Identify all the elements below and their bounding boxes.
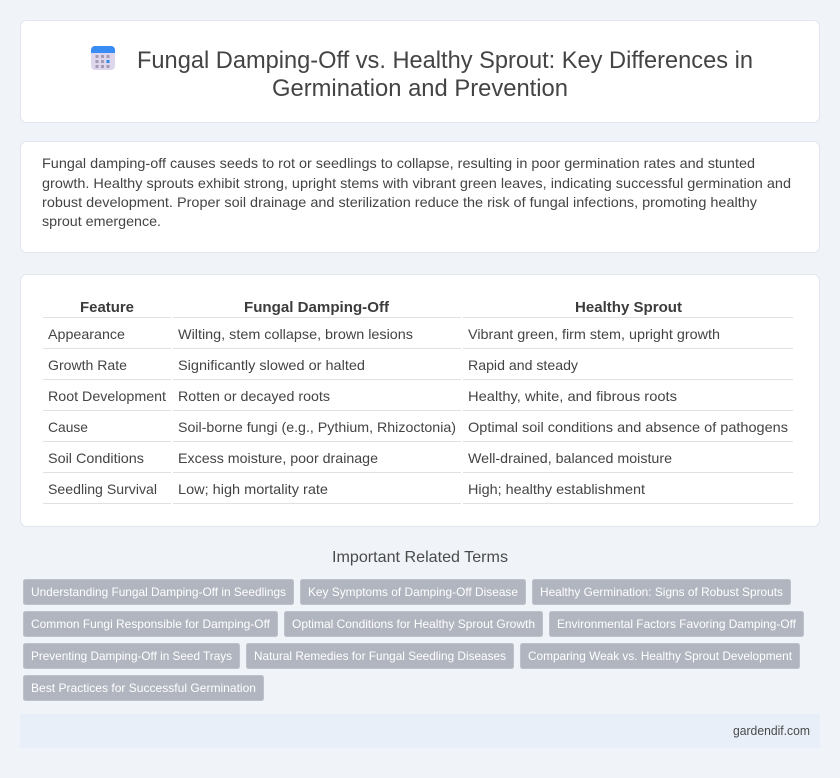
table row: soil conditions: Soil Conditions: [48, 450, 144, 466]
tag: [532, 580, 790, 604]
title: Germination and Prevention: [272, 75, 568, 102]
table row: seedling survival: High; healthy establishment: [468, 481, 645, 497]
tag: Common Fungi Responsible for Damping-Off: [31, 617, 271, 631]
table row: cause: Cause: [48, 419, 88, 435]
tag: Healthy Germination: Signs of Robust Sprouts: [540, 585, 783, 599]
table row: appearance: Appearance: [48, 326, 125, 342]
table row: seedling survival: Seedling Survival: [48, 481, 157, 497]
tag: Natural Remedies for Fungal Seedling Diseases: [254, 649, 506, 663]
related term tags: [24, 580, 804, 700]
table row: growth rate: Growth Rate: [48, 357, 127, 373]
text block: summary: [42, 155, 791, 229]
table header: Feature: [80, 299, 134, 316]
panel: summary paragraph: [20, 142, 820, 252]
tag: [300, 580, 526, 604]
table row: growth rate: Significantly slowed or halted: [178, 357, 365, 373]
tag: [24, 644, 240, 668]
table row: cause: Optimal soil conditions and absence of pathogens: [468, 419, 788, 435]
tag: Preventing Damping-Off in Seed Trays: [31, 649, 232, 663]
table row: root development: Healthy, white, and fibrous roots: [468, 388, 677, 404]
table row: growth rate: Rapid and steady: [468, 357, 578, 373]
tag: Understanding Fungal Damping-Off in Seedlings: [31, 585, 286, 599]
table header: [80, 299, 682, 316]
text block: summary: growth. Healthy sprouts exhibit strong, upright stems with vibrant green leaves, indicating successful germination and: [42, 175, 791, 191]
title: Fungal Damping-Off vs. Healthy Sprout: Key Differences in: [137, 47, 753, 74]
table row: seedling survival: Low; high mortality rate: [178, 481, 328, 497]
text block: summary: robust development. Proper soil drainage and sterilization reduce the risk of fungal infections, promoting healthy: [42, 194, 757, 210]
table row: appearance: Vibrant green, firm stem, upright growth: [468, 326, 720, 342]
footer source: gardendif.com: [733, 723, 810, 738]
panel: comparison table: [20, 274, 820, 526]
table row: cause: [48, 419, 788, 435]
table row: cause: Soil-borne fungi (e.g., Pythium, Rhizoctonia): [178, 419, 456, 435]
tag: [24, 580, 294, 604]
tag: Best Practices for Successful Germination: [31, 681, 256, 695]
footer bar: [20, 714, 820, 748]
table row: appearance: [48, 326, 720, 342]
title: [137, 47, 753, 102]
tag: [24, 676, 264, 700]
table row: root development: Root Development: [48, 388, 166, 404]
tag: [24, 612, 278, 636]
tag: [284, 612, 542, 636]
table header: Healthy Sprout: [575, 299, 682, 316]
table row: root development: Rotten or decayed roots: [178, 388, 330, 404]
text block: summary: sprout emergence.: [42, 213, 161, 229]
tag: Environmental Factors Favoring Damping-Off: [557, 617, 797, 631]
table header: Fungal Damping-Off: [244, 299, 390, 316]
tag: [520, 644, 800, 668]
text block: summary: Fungal damping-off causes seeds to rot or seedlings to collapse, resulting in poor germination rates and stunted: [42, 155, 755, 171]
tag: [246, 644, 514, 668]
table row: appearance: Wilting, stem collapse, brown lesions: [178, 326, 413, 342]
table row: growth rate: [48, 357, 578, 373]
tag: Key Symptoms of Damping-Off Disease: [308, 585, 518, 599]
table row: seedling survival: [48, 481, 645, 497]
table row: soil conditions: [48, 450, 672, 466]
table row: soil conditions: Well-drained, balanced moisture: [468, 450, 672, 466]
table row: root development: [48, 388, 677, 404]
tag: [550, 612, 804, 636]
table row: soil conditions: Excess moisture, poor drainage: [178, 450, 378, 466]
icon: calendar: [91, 46, 115, 70]
tag: Optimal Conditions for Healthy Sprout Growth: [292, 617, 535, 631]
heading: important related terms: Important Related Terms: [332, 549, 508, 566]
tag: Comparing Weak vs. Healthy Sprout Development: [528, 649, 793, 663]
panel: header: [20, 20, 820, 122]
